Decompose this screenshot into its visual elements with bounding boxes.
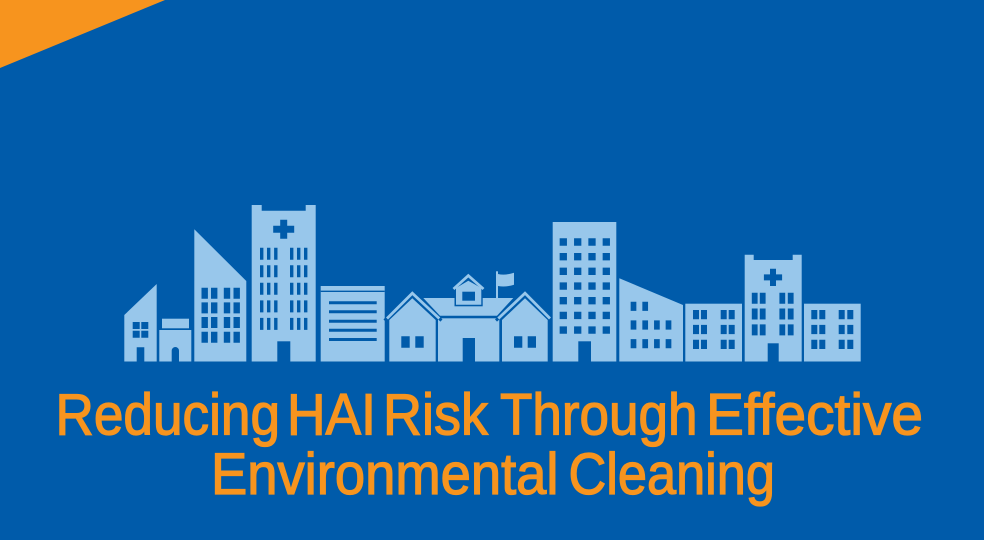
title line 2: Cleaning [568, 442, 775, 507]
sloped roof building [619, 278, 683, 362]
title line 1: Effective [706, 382, 923, 447]
end mid-rise block [804, 304, 861, 362]
small peaked house [124, 284, 157, 362]
small shop [159, 319, 191, 362]
small hospital with cross [745, 255, 802, 362]
school [384, 271, 552, 362]
slanted roof building [194, 229, 246, 362]
title line 1: Reducing [56, 382, 280, 447]
title [56, 382, 923, 507]
apartment tower [553, 222, 616, 362]
dormer [454, 276, 484, 306]
right wing house [496, 293, 552, 362]
title line 1: HAI [287, 382, 376, 447]
school roof [423, 298, 513, 316]
orange corner banner [0, 0, 165, 68]
school centre block [438, 318, 499, 362]
title line 1 [56, 382, 923, 447]
low office building [321, 286, 385, 362]
title line 1: Risk [383, 382, 489, 447]
flag [496, 271, 514, 298]
title line 1: Through [500, 382, 698, 447]
title line 2 [211, 442, 775, 507]
mid-rise block [685, 304, 742, 362]
left wing house [384, 293, 442, 362]
city skyline illustration [124, 205, 861, 362]
title line 2: Environmental [211, 442, 558, 507]
tall hospital with cross [252, 205, 316, 362]
